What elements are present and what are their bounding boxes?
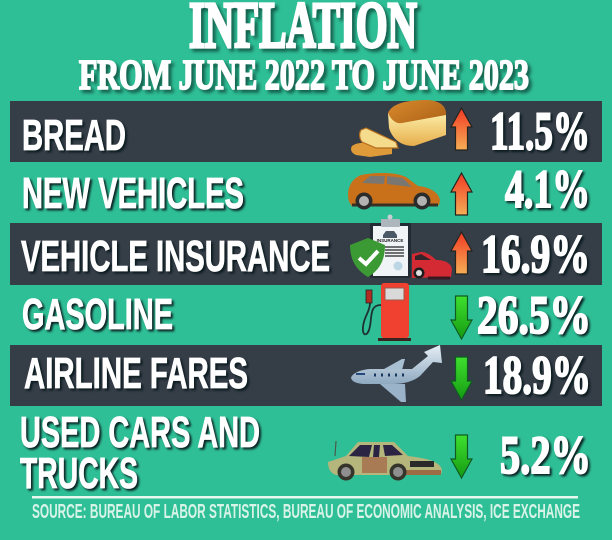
icon: insurance clipboard with shield and red car [350, 214, 452, 278]
label: used cars and trucks: USED CARS AND [20, 408, 260, 457]
label: gasoline: GASOLINE [22, 290, 173, 339]
arrow: down [451, 357, 472, 400]
icon: orange car [348, 173, 440, 210]
icon: airplane [351, 345, 442, 402]
icon: insurance clipboard with shield and red car: INSURANCE [377, 238, 403, 243]
icon: old car [328, 441, 442, 480]
panel: vehicle insurance row [10, 214, 602, 285]
label: vehicle insurance: VEHICLE INSURANCE [21, 232, 330, 281]
arrow: up [451, 173, 472, 215]
panel: new vehicles row [22, 159, 590, 219]
panel: bread row [10, 100, 602, 162]
icon: bread loaf [351, 100, 446, 157]
arrow: down [451, 435, 472, 478]
arrow: up [451, 108, 472, 150]
arrow: down [451, 296, 472, 339]
arrow: up [451, 232, 472, 274]
label: new vehicles: NEW VEHICLES [22, 169, 244, 218]
panel: used cars and trucks row [20, 408, 591, 498]
label: bread: BREAD [22, 111, 126, 160]
panel: airline fares row [10, 345, 602, 406]
label: used cars and trucks: TRUCKS [20, 449, 138, 498]
label: airline fares: AIRLINE FARES [24, 349, 248, 398]
icon: gas pump [363, 283, 411, 341]
label: used cars and trucks [20, 408, 260, 498]
panel: gasoline row [22, 283, 591, 345]
